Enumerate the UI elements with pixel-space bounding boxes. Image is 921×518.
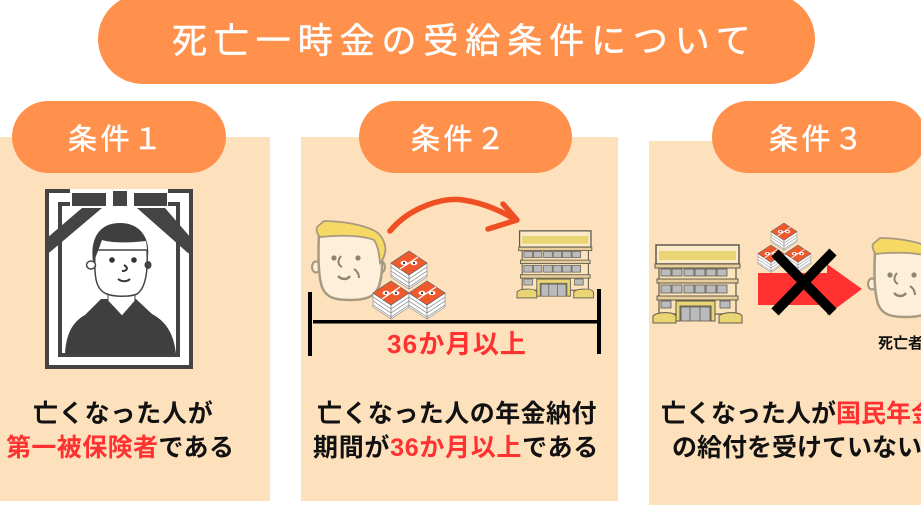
condition 1 text: 亡くなった人が: [33, 399, 214, 428]
icon: memorial portrait: [45, 189, 193, 369]
icon: money stacks: [758, 223, 811, 272]
period label: 36か月以上: [387, 329, 527, 359]
icon: money stacks: [373, 251, 445, 319]
icon: person: [312, 221, 385, 300]
panel: condition 2: [301, 101, 618, 501]
icon: black cross: [775, 252, 833, 312]
condition 2 text: 期間が36か月以上である: [313, 433, 599, 462]
condition 3 pill: 条件３: [769, 123, 867, 156]
icon: deceased person: [868, 238, 921, 317]
condition 3 text: の給付を受けていない: [672, 434, 921, 462]
condition 2 pill: 条件２: [411, 123, 509, 156]
condition 3 pill: [712, 101, 921, 173]
condition 2 text: 亡くなった人の年金納付: [317, 400, 597, 428]
condition 2 pill: [359, 101, 572, 173]
condition 1 text: 第一被保険者である: [6, 434, 234, 462]
title banner: [98, 0, 815, 84]
condition 2 text: [313, 400, 599, 462]
icon: pension office: [517, 231, 594, 298]
condition 1 text: [6, 399, 234, 462]
arrow: red payment arrow: [758, 264, 862, 315]
condition 1 pill: [12, 101, 226, 173]
arrow: payment to office: [390, 199, 517, 231]
period bracket: [308, 289, 601, 356]
condition 3 text: [661, 399, 921, 462]
panel: condition 3: [649, 101, 921, 505]
panel: condition 1: [0, 101, 270, 501]
condition 1 pill: 条件１: [68, 123, 166, 156]
icon: pension office: [653, 245, 742, 323]
title banner: 死亡一時金の受給条件について: [172, 22, 758, 61]
